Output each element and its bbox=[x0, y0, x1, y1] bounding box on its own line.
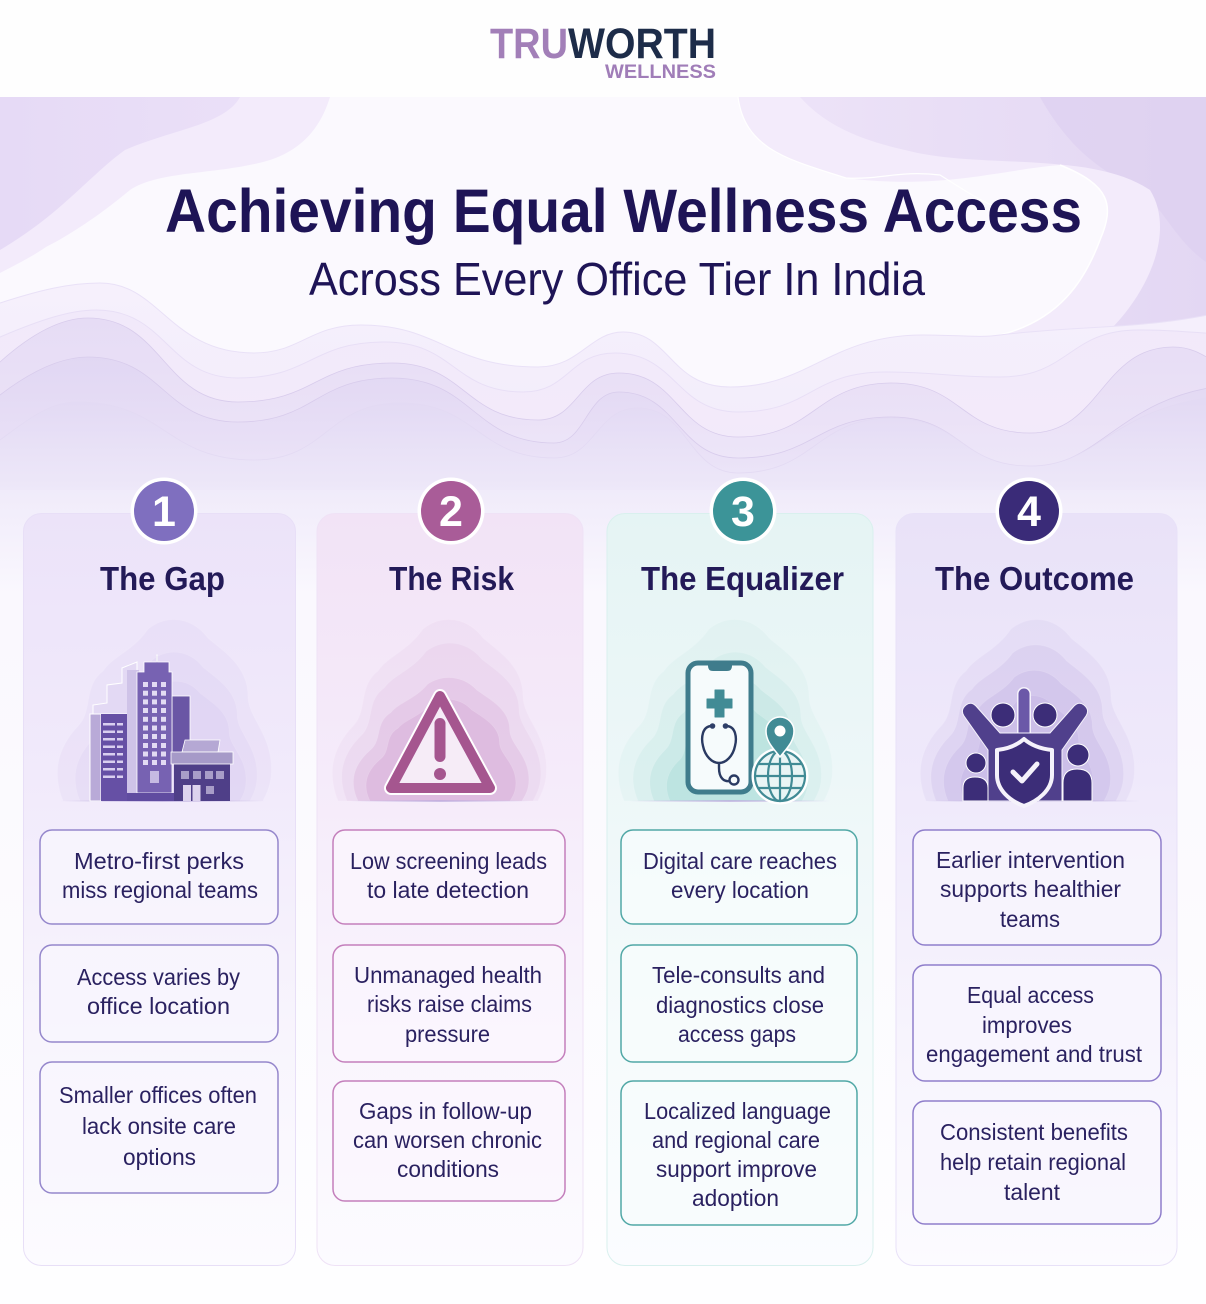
item: smaller offices bbox=[40, 1062, 278, 1193]
header band bbox=[0, 0, 1206, 97]
item: localized language: and regional care bbox=[652, 1127, 820, 1153]
item: equal access: engagement and trust bbox=[926, 1041, 1143, 1067]
item: tele-consults bbox=[621, 945, 857, 1062]
item: earlier intervention bbox=[913, 830, 1161, 945]
item: equal access bbox=[913, 965, 1161, 1081]
item: localized language bbox=[621, 1081, 857, 1225]
item: unmanaged risks: risks raise claims bbox=[367, 991, 532, 1017]
item: consistent benefits: talent bbox=[1004, 1179, 1061, 1205]
heading: The Gap: The Gap bbox=[100, 560, 225, 597]
item: unmanaged risks: Unmanaged health bbox=[354, 962, 542, 988]
item: digital care bbox=[621, 830, 857, 924]
item: follow-up gaps: can worsen chronic bbox=[353, 1127, 542, 1153]
item: equal access: Equal access bbox=[967, 982, 1094, 1008]
logo: Truworth Wellness: WORTH bbox=[568, 20, 716, 68]
item: smaller offices: options bbox=[123, 1144, 196, 1170]
number badge 1 bbox=[130, 478, 198, 544]
item: tele-consults: diagnostics close bbox=[656, 992, 824, 1018]
panel: The Equalizer bbox=[607, 478, 873, 1266]
item: access varies: Access varies by bbox=[77, 964, 240, 990]
subtitle: Across Every Office Tier In India bbox=[309, 253, 925, 305]
logo: Truworth Wellness bbox=[490, 20, 716, 83]
number badge 3: 3 bbox=[731, 488, 755, 536]
item: earlier intervention: Earlier intervention bbox=[936, 847, 1125, 873]
item: earlier intervention: teams bbox=[1000, 906, 1060, 932]
item: smaller offices: Smaller offices often bbox=[59, 1082, 257, 1108]
number badge 2 bbox=[418, 478, 484, 544]
item: consistent benefits: Consistent benefits bbox=[940, 1119, 1128, 1145]
panel: The Risk bbox=[317, 478, 583, 1266]
item: localized language: adoption bbox=[692, 1185, 779, 1211]
icon: warning triangle bbox=[332, 619, 546, 802]
item: tele-consults: access gaps bbox=[678, 1021, 796, 1047]
item: unmanaged risks: pressure bbox=[405, 1021, 490, 1047]
logo: Truworth Wellness: WELLNESS bbox=[605, 62, 716, 83]
item: access varies bbox=[40, 945, 278, 1042]
item: low screening: to late detection bbox=[367, 877, 529, 903]
item: digital care: every location bbox=[671, 877, 809, 903]
icon: phone with stethoscope and globe bbox=[618, 619, 832, 803]
item: consistent benefits bbox=[913, 1101, 1161, 1224]
item: low screening bbox=[333, 830, 565, 924]
item: smaller offices: lack onsite care bbox=[82, 1113, 236, 1139]
item: metro-first: miss regional teams bbox=[62, 877, 258, 903]
number badge 2: 2 bbox=[439, 488, 463, 536]
icon: team with shield bbox=[920, 619, 1140, 806]
number badge 4: 4 bbox=[1017, 488, 1041, 536]
number badge 1: 1 bbox=[152, 488, 176, 536]
title: Achieving Equal Wellness Access bbox=[165, 177, 1082, 245]
item: localized language: support improve bbox=[656, 1156, 817, 1182]
item: unmanaged risks bbox=[333, 945, 565, 1062]
item: metro-first: Metro-first perks bbox=[74, 848, 244, 874]
item: follow-up gaps: conditions bbox=[397, 1156, 499, 1182]
item: metro-first bbox=[40, 830, 278, 924]
item: earlier intervention: supports healthier bbox=[940, 876, 1121, 902]
item: access varies: office location bbox=[87, 993, 230, 1019]
heading: The Outcome: The Outcome bbox=[935, 560, 1134, 597]
heading: The Risk: The Risk bbox=[389, 560, 515, 597]
item: localized language: Localized language bbox=[644, 1098, 831, 1124]
item: equal access: improves bbox=[982, 1012, 1072, 1038]
panel: The Gap bbox=[24, 478, 296, 1266]
number badge 4 bbox=[996, 478, 1062, 544]
item: digital care: Digital care reaches bbox=[643, 848, 837, 874]
number badge 3 bbox=[710, 478, 776, 544]
item: follow-up gaps: Gaps in follow-up bbox=[359, 1098, 532, 1124]
logo: Truworth Wellness: TRU bbox=[490, 20, 568, 68]
item: consistent benefits: help retain regional bbox=[940, 1149, 1126, 1175]
icon: office buildings bbox=[57, 619, 271, 802]
panel: The Outcome bbox=[896, 478, 1177, 1266]
heading: The Equalizer: The Equalizer bbox=[641, 560, 844, 597]
item: low screening: Low screening leads bbox=[350, 848, 547, 874]
item: follow-up gaps bbox=[333, 1081, 565, 1201]
item: tele-consults: Tele-consults and bbox=[652, 962, 825, 988]
